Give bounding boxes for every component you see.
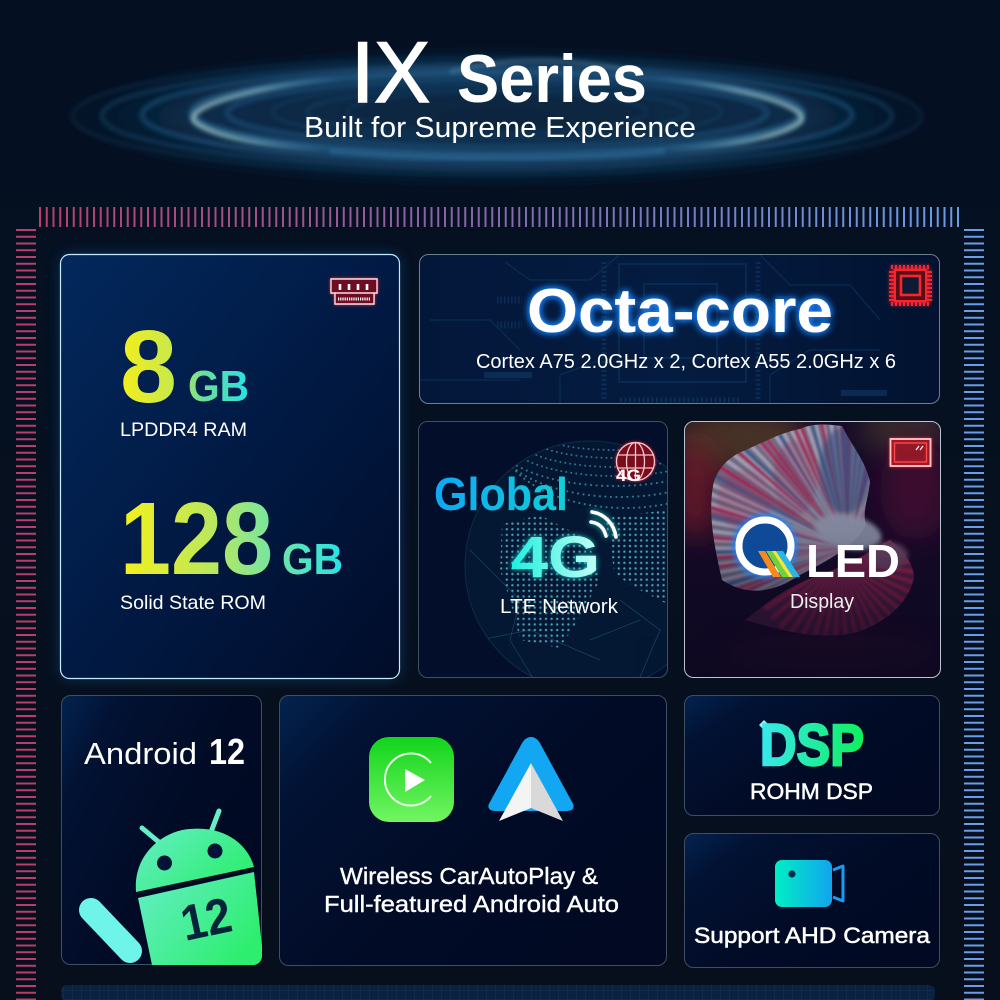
heading: global: Global — [434, 468, 568, 520]
heading: android 12: 12 — [209, 731, 245, 772]
title — [351, 25, 647, 121]
ram label: LPDDR4 RAM — [120, 419, 247, 441]
icon: carplay — [369, 737, 454, 822]
circuit background — [420, 255, 887, 404]
label: display: Display — [790, 591, 854, 613]
title: IX — [351, 25, 430, 121]
rom label: Solid State ROM — [120, 592, 266, 614]
caption: Wireless CarAutoPlay & — [340, 863, 598, 889]
panel: qled display — [684, 421, 941, 678]
icon: globe 4g: 4G — [616, 466, 641, 485]
robot arm — [91, 910, 130, 951]
icon: camera — [775, 860, 843, 907]
label: rohm dsp: ROHM DSP — [750, 779, 873, 804]
panel: memory and storage — [60, 254, 400, 678]
upper fin — [711, 424, 870, 591]
logo: qled: LED — [806, 535, 900, 587]
icon: display — [890, 439, 930, 466]
icon: android robot — [91, 811, 264, 965]
fish photo — [685, 422, 940, 636]
icon: ram — [331, 279, 377, 304]
bottom panel strip — [61, 985, 935, 1000]
heading: 4g with signal arcs: 4G — [511, 525, 600, 590]
caption — [324, 863, 619, 917]
panel: ahd camera — [684, 834, 940, 968]
heading: 4g with signal arcs — [511, 512, 616, 590]
q ring — [739, 520, 791, 572]
icon: globe 4g — [616, 442, 654, 485]
icon: android auto — [488, 737, 574, 821]
ram figure — [120, 309, 249, 424]
ram figure: 8 — [120, 309, 177, 424]
panel: carplay and android auto — [280, 696, 666, 966]
label: support ahd camera: Support AHD Camera — [694, 923, 931, 948]
lower fin — [745, 540, 914, 636]
header swirl graphic — [52, 45, 942, 189]
label: lte network: LTE Network — [500, 596, 619, 618]
panel: rohm dsp — [684, 696, 940, 816]
subtitle: Built for Supreme Experience — [304, 112, 696, 144]
ram figure: GB — [188, 362, 249, 411]
icon: chip — [889, 265, 932, 306]
logo: dsp: DSP — [760, 713, 864, 778]
tick frame — [26, 217, 974, 1000]
q stripes — [758, 551, 800, 577]
panel: octa-core — [420, 254, 940, 404]
panel: global 4g — [418, 421, 668, 678]
caption: Full-featured Android Auto — [324, 891, 619, 917]
heading: octa-core: Octa-core — [527, 277, 833, 346]
logo: qled — [739, 520, 900, 587]
spec line: Cortex A75 2.0GHz x 2, Cortex A55 2.0GHz x 6 — [476, 351, 896, 373]
panel: android 12 — [62, 696, 264, 965]
fish body — [812, 512, 884, 553]
rom figure: GB — [282, 535, 343, 584]
robot number: 12 — [176, 887, 237, 952]
globe graphic — [464, 440, 667, 677]
rom figure: 128 — [120, 481, 273, 596]
heading: android 12 — [84, 731, 245, 772]
heading: android 12: Android — [84, 736, 197, 771]
title: Series — [457, 41, 647, 117]
